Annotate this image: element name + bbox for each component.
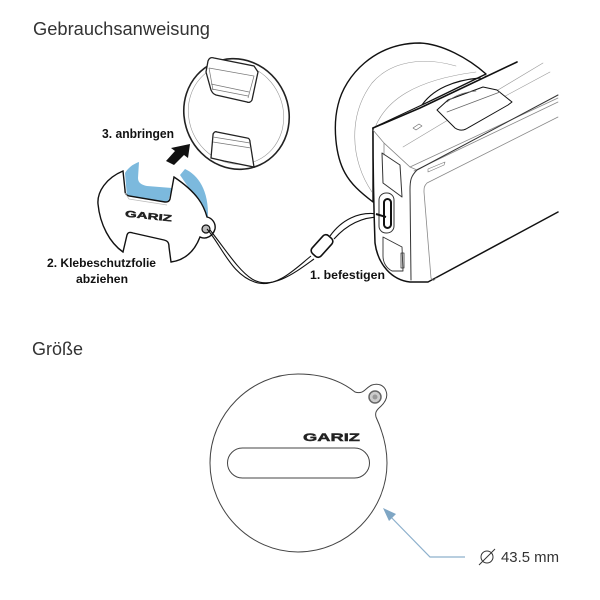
- label: 2. Klebeschutzfolie abziehen: 2. Klebeschutzfolie: [47, 256, 156, 270]
- disc with eyelet tab: [210, 374, 387, 552]
- camera screen: [410, 95, 558, 280]
- holder body: [98, 171, 215, 262]
- label: 2. Klebeschutzfolie abziehen: [47, 256, 156, 286]
- arrow: attach direction: [166, 144, 190, 165]
- camera body: [373, 62, 558, 282]
- holder eyelet: [202, 225, 210, 233]
- label: 2. Klebeschutzfolie abziehen: abziehen: [76, 272, 128, 286]
- camera ports: [382, 153, 402, 197]
- label: diameter 43.5 mm: 43.5 mm: [501, 550, 559, 566]
- heading: Größe: Größe: [32, 339, 83, 359]
- icon: lens cap: [166, 41, 307, 187]
- logo: GARIZ: [303, 432, 360, 444]
- adhesive film: left: [125, 162, 172, 202]
- holder logo: GARIZ: [125, 209, 173, 224]
- icon: cap holder with adhesive film: [98, 162, 215, 262]
- icon: wrist cord: [207, 213, 383, 284]
- eyelet: [369, 391, 381, 403]
- label: 1. befestigen: 1. befestigen: [310, 268, 385, 282]
- camera lens: [335, 43, 486, 202]
- adhesive film: right: [180, 169, 208, 218]
- icon: camera: [335, 43, 558, 282]
- camera top details: [384, 63, 550, 167]
- slot: [228, 448, 370, 478]
- cord loop at camera: [376, 214, 386, 217]
- label: diameter 43.5 mm: [479, 549, 559, 566]
- arrow: diameter leader: [383, 508, 465, 557]
- heading: Gebrauchsanweisung: Gebrauchsanweisung: [33, 19, 210, 39]
- icon: holder outline (size view): [210, 374, 387, 552]
- label: 3. anbringen: 3. anbringen: [102, 127, 174, 141]
